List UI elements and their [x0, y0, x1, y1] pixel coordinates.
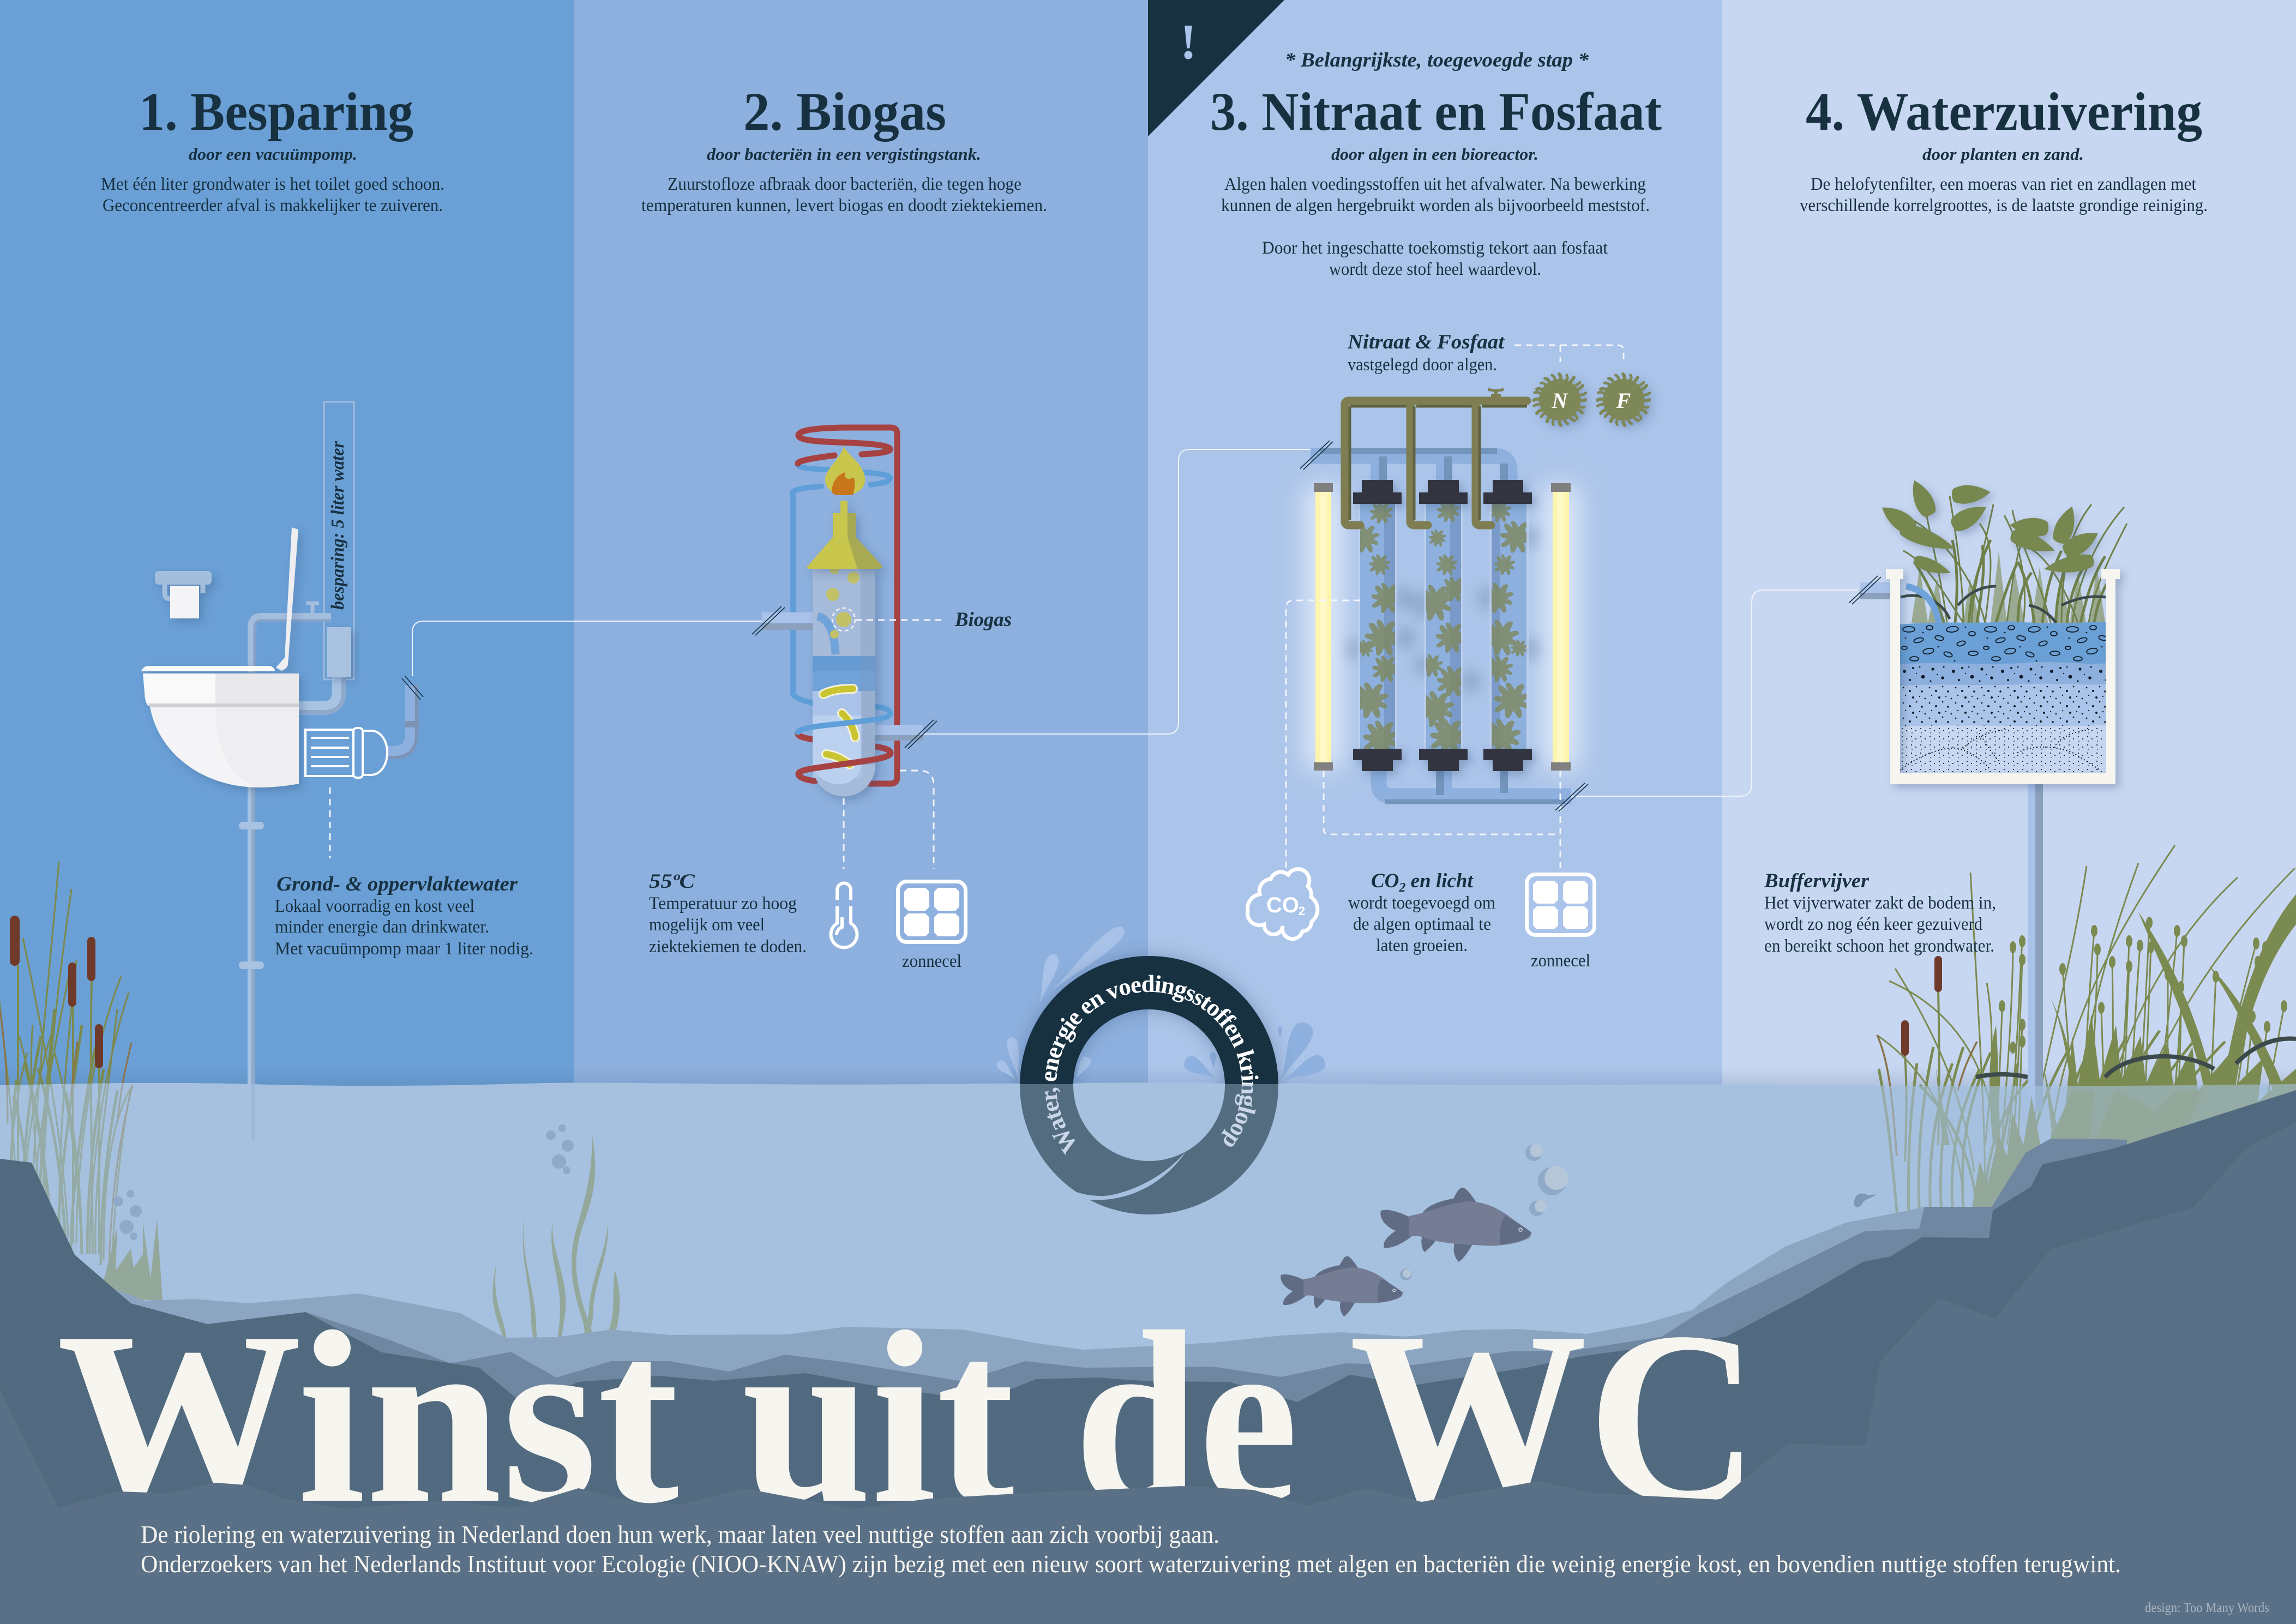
- title: [57, 1280, 1759, 1554]
- dashed leader: biogas: [855, 619, 941, 621]
- icon: vacuum pump: [305, 728, 387, 778]
- label: besparing: besparing: 5 liter water: [328, 441, 348, 610]
- icon: tap: [1488, 388, 1504, 398]
- text: buffervijver: wordt zo nog één keer gezuiverd: [1764, 915, 1982, 934]
- biogas: yellow hood: [807, 501, 882, 569]
- besparing tank outline: [324, 402, 354, 679]
- text: CO2 en licht: CO: [1371, 870, 1399, 892]
- reactor: black end caps: [1353, 480, 1532, 771]
- text: CO2 en licht: de algen optimaal te: [1353, 915, 1491, 934]
- ground: back layer: [0, 1207, 2018, 1624]
- filter outflow pipe: [2028, 784, 2043, 1111]
- text: grond- en oppervlaktewater: Met vacuümpomp maar 1 liter nodig.: [275, 939, 533, 959]
- biogas: gas bubbles: [826, 564, 860, 639]
- reactor: pipe stubs: [1371, 456, 1508, 795]
- bubbles: weed: [546, 1124, 574, 1174]
- credit: design: Too Many Words: [2145, 1601, 2269, 1615]
- heading: step 1: door een vacuümpomp.: [189, 145, 357, 164]
- icon: nitrate algae: [1527, 368, 1592, 432]
- text: grond- en oppervlaktewater: [275, 873, 533, 959]
- reactor: algae tube 2: [1424, 504, 1463, 749]
- pipe: pump outlet: [387, 685, 419, 757]
- icon: CO2 cloud: 2: [1299, 904, 1305, 918]
- slashes: biogas line breaks: [752, 606, 937, 749]
- heading: step 4: [1800, 81, 2208, 215]
- panel: column 4 background: [1722, 0, 2296, 1091]
- heading: step 4: 4. Waterzuivering: [1806, 81, 2202, 142]
- icon: nitrate algae: N: [1552, 388, 1569, 413]
- bubbles: left: [113, 1190, 142, 1240]
- intro text: De riolering en waterzuivering in Nederland doen hun werk, maar laten veel nuttige stoffen aan zich voorbij gaan.: [141, 1520, 1219, 1548]
- ring: water, energy and nutrient cycle: Water, energie en voedingsstoffen kringloop: [1045, 975, 1259, 1155]
- filter: inlet stream: [1906, 586, 1939, 623]
- heading: step 1: [101, 81, 444, 215]
- cistern: [327, 627, 351, 677]
- fish: large carp: [1380, 1188, 1531, 1262]
- reactor: algae tube 3: [1489, 504, 1529, 749]
- biogas: bacteria: [824, 689, 855, 765]
- title: WC: [1349, 1280, 1759, 1554]
- title: de: [1074, 1280, 1298, 1554]
- ground: middle layer: [273, 1139, 2127, 1624]
- heading: step 2: temperaturen kunnen, levert biogas en doodt ziektekiemen.: [641, 196, 1047, 215]
- reactor: olive collection pipe: [1345, 401, 1527, 525]
- reactor: algae shadows: [1346, 526, 1540, 694]
- label: zonnecel: zonnecel: [1531, 951, 1590, 971]
- pipes: toilet supply and flush: [252, 603, 344, 712]
- text: CO2 en licht: en licht: [1405, 870, 1474, 892]
- pipe: overflow from toilet into the ground: [239, 785, 264, 1140]
- heading: step 1: 1. Besparing: [139, 81, 413, 142]
- heading: step 2: [641, 81, 1047, 215]
- text: grond- en oppervlaktewater: minder energie dan drinkwater.: [275, 917, 489, 937]
- text: nitraat en fosfaat: [1347, 331, 1505, 375]
- dashed leader: pump: [329, 787, 330, 858]
- panel: column 2 background: [574, 0, 1148, 1091]
- title: Winst: [57, 1280, 682, 1554]
- plants: right sedges and cattails: [1877, 845, 2296, 1222]
- dashed leader: algae: [1514, 345, 1624, 363]
- heading: step 2: door bacteriën in een vergistingstank.: [707, 145, 981, 164]
- plant: submerged bank vegetation right: [1972, 1091, 2203, 1207]
- ring shadow: [1012, 948, 1285, 1084]
- biogas: digester tube: [813, 569, 875, 796]
- dashed leaders: thermometer and solar cell: [844, 771, 934, 869]
- filter: sand and gravel layers: [1900, 621, 2106, 773]
- icon: solar cell: [898, 881, 965, 942]
- water body: [0, 1082, 2296, 1624]
- plants: left reeds and cattails: [0, 862, 133, 1265]
- biogas: outlet pipes: [762, 612, 923, 741]
- text: nitraat en fosfaat: vastgelegd door algen.: [1348, 355, 1497, 375]
- text: CO2 en licht: 2: [1398, 881, 1405, 895]
- heading: step 3: [1210, 49, 1662, 279]
- reactor: blue pipework: [1311, 451, 1571, 802]
- text: CO2 en licht: wordt toegevoegd om: [1348, 893, 1495, 913]
- slash: filter line break: [1849, 576, 1881, 604]
- heading: step 3: kunnen de algen hergebruikt worden als bijvoorbeeld meststof.: [1221, 196, 1650, 215]
- water overlay tinting the submerged plants: [0, 1082, 2296, 1418]
- label: biogas: Biogas: [954, 609, 1012, 631]
- bubbles: fish: [1400, 1144, 1568, 1280]
- icon: flame: [825, 446, 865, 495]
- intro text: Onderzoekers van het Nederlands Instituut voor Ecologie (NIOO-KNAW) zijn bezig met een nieuw soort waterzuivering met algen en bacteriën die weinig energie kost, en bovendien nuttige stoffen terugwint.: [141, 1550, 2121, 1578]
- plant: small water tufts bottom left: [99, 1219, 163, 1301]
- icon: phosphate algae: F: [1616, 388, 1631, 413]
- text: CO2 en licht: [1348, 870, 1495, 955]
- dashed leaders: CO2 and light: [1286, 600, 1560, 868]
- slash: toilet line break: [402, 676, 423, 700]
- heading: step 3: 3. Nitraat en Fosfaat: [1210, 81, 1662, 142]
- text: buffervijver: [1764, 870, 1996, 956]
- slashes: reactor line breaks: [1300, 441, 1588, 811]
- reactor: left lamp: [1314, 483, 1333, 771]
- text: buffervijver: Het vijverwater zakt de bodem in,: [1764, 893, 1996, 913]
- heading: step 3: door algen in een bioreactor.: [1331, 145, 1538, 164]
- text: buffervijver: en bereikt schoon het grondwater.: [1764, 936, 1994, 956]
- panel: column 1 background: [0, 0, 574, 1091]
- icon: toilet paper: [155, 571, 212, 618]
- heading: step 4: verschillende korrelgroottes, is de laatste grondige reiniging.: [1800, 196, 2208, 215]
- icon: CO2 cloud: [1247, 869, 1318, 939]
- icon: toilet: [141, 527, 299, 787]
- text: temperature: ziektekiemen te doden.: [649, 937, 807, 957]
- heading: step 4: De helofytenfilter, een moeras van riet en zandlagen met: [1811, 175, 2196, 194]
- icon: exclamation corner flag: !: [1180, 14, 1197, 69]
- text: grond- en oppervlaktewater: Lokaal voorradig en kost veel: [275, 897, 474, 916]
- text: temperature: 55ºC: [649, 870, 696, 893]
- icon: thermometer: [831, 883, 857, 947]
- icon: exclamation corner flag: [1148, 0, 1284, 136]
- biogas: inlet water stream: [818, 616, 836, 654]
- reactor: algae tube 1: [1358, 504, 1397, 749]
- filter: container walls: [1886, 569, 2120, 784]
- text: grond- en oppervlaktewater: Grond- & oppervlaktewater: [277, 873, 518, 895]
- text: temperature: [649, 870, 807, 957]
- panel: column 3 background: [1148, 0, 1722, 1091]
- plant: waving weed left of centre: [492, 1133, 620, 1378]
- ground: dark hills: [0, 1090, 2296, 1624]
- label: zonnecel: zonnecel: [902, 952, 961, 971]
- small tadpole under the bank: [1854, 1194, 1876, 1207]
- icon: solar cell: [1527, 875, 1595, 935]
- heading: step 4: door planten en zand.: [1922, 145, 2084, 164]
- reactor: lamp glow: [1305, 485, 1580, 769]
- heading: step 1: Geconcentreerder afval is makkelijker te zuiveren.: [103, 196, 443, 215]
- heading: step 3: Door het ingeschatte toekomstig tekort aan fosfaat: [1262, 238, 1608, 258]
- filter: reed plants: [1877, 476, 2127, 623]
- text: buffervijver: Buffervijver: [1764, 870, 1870, 892]
- filter: inlet pipe: [1860, 582, 1890, 599]
- ring: water, energy and nutrient cycle: [1020, 956, 1278, 1214]
- connector lines between the steps: [412, 449, 1858, 796]
- text: CO2 en licht: laten groeien.: [1376, 936, 1468, 955]
- title: uit: [742, 1280, 1017, 1554]
- heading: step 3: * Belangrijkste, toegevoegde stap *: [1285, 49, 1589, 71]
- biogas: coils in front of tube: [798, 713, 891, 774]
- text: temperature: Temperatuur zo hoog: [649, 894, 797, 913]
- heading: step 1: Met één liter grondwater is het toilet goed schoon.: [101, 175, 444, 194]
- text: temperature: mogelijk om veel: [649, 915, 765, 935]
- ground: front layer: [0, 1122, 2296, 1624]
- heading: step 3: Algen halen voedingsstoffen uit het afvalwater. Na bewerking: [1224, 175, 1646, 194]
- water surface shading: [0, 1066, 2296, 1086]
- text: nitraat en fosfaat: Nitraat & Fosfaat: [1347, 331, 1505, 353]
- heading: step 2: 2. Biogas: [743, 81, 946, 142]
- splashes around the ring: [995, 922, 1328, 1088]
- heading: step 3: wordt deze stof heel waardevol.: [1329, 260, 1541, 279]
- icon: CO2 cloud: CO: [1266, 893, 1299, 917]
- intro text: [141, 1520, 2121, 1578]
- heading: step 2: Zuurstofloze afbraak door bacteriën, die tegen hoge: [668, 175, 1021, 194]
- reactor: right lamp: [1551, 483, 1571, 771]
- fish: small carp: [1281, 1256, 1403, 1316]
- icon: phosphate algae: [1591, 368, 1656, 432]
- biogas: coils behind tube: [793, 428, 897, 784]
